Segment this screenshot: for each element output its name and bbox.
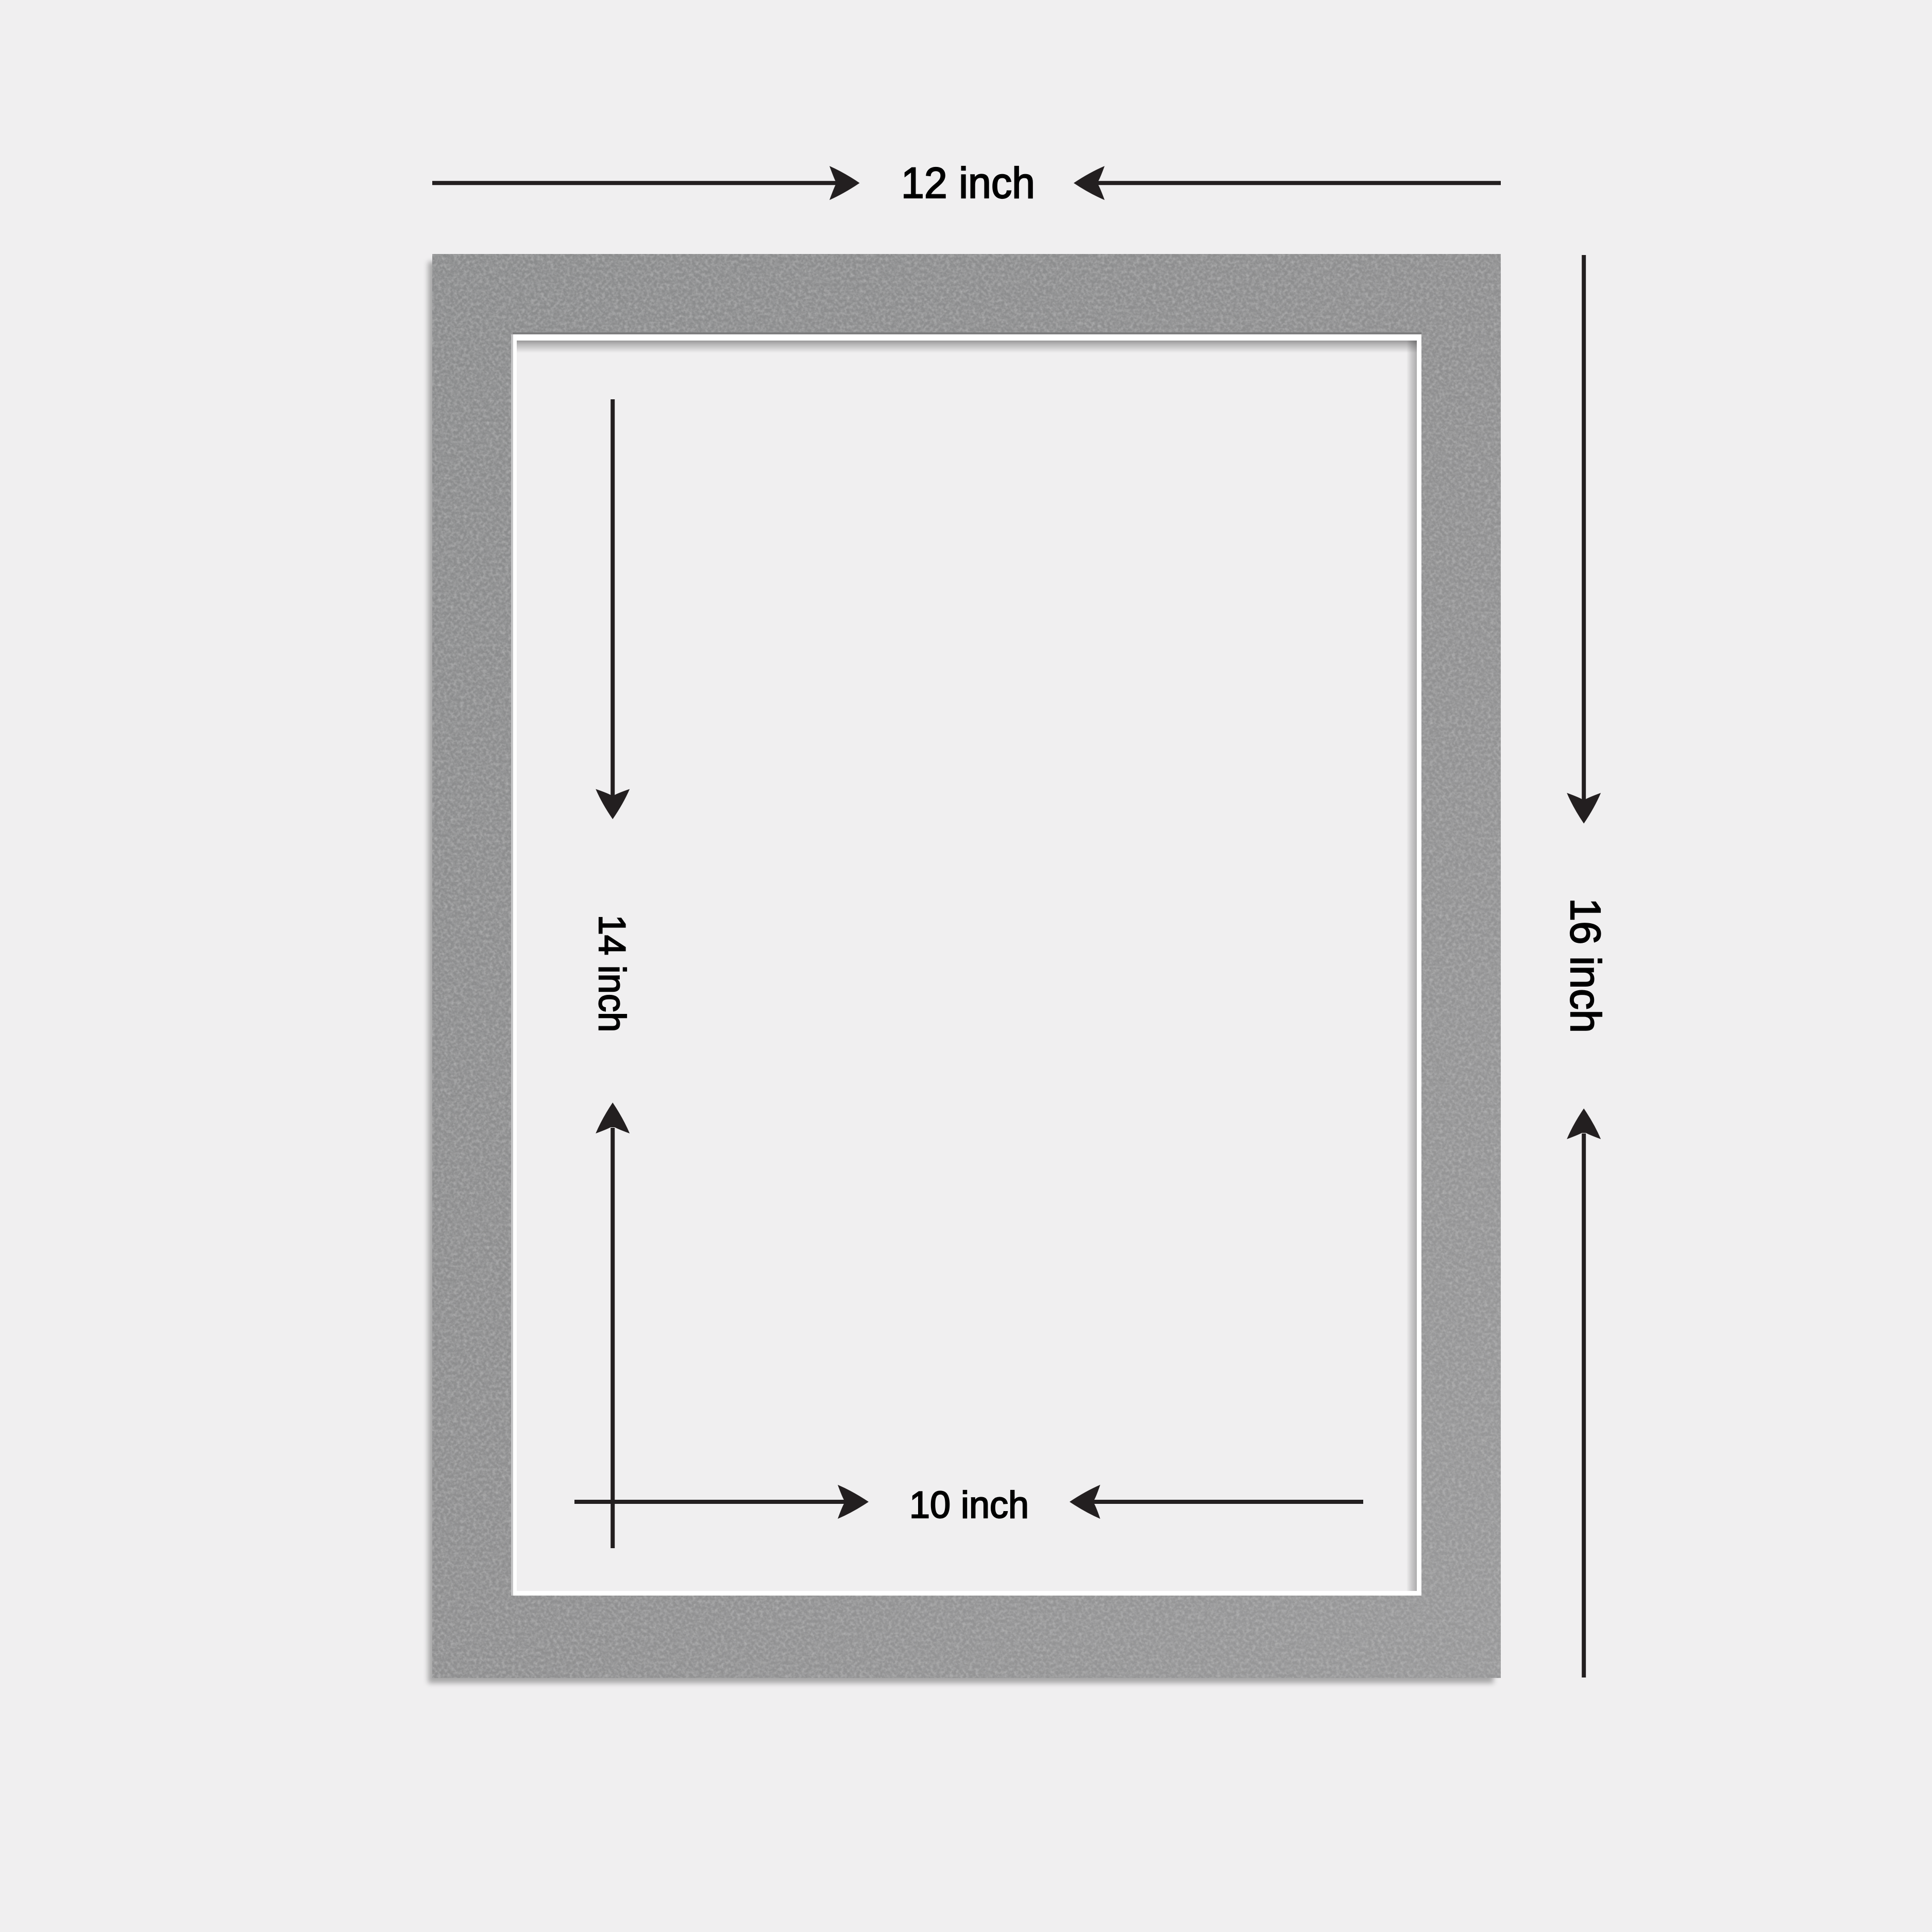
arrow: left pointing right bbox=[574, 1485, 869, 1519]
dimension: outer width 12 inch bbox=[432, 159, 1501, 207]
inner shadow: top edge bbox=[517, 341, 1417, 353]
white bevel of opening bbox=[513, 334, 1421, 1596]
panel: grey mat board frame bbox=[428, 254, 1501, 1683]
dimension: inner height 14 inch bbox=[591, 399, 633, 1548]
arrow: bottom pointing up bbox=[1567, 1109, 1601, 1677]
label: 14 inch: 14 inch bbox=[591, 915, 633, 1032]
frame paper texture bbox=[432, 254, 1501, 1678]
arrow: right pointing left bbox=[1070, 1485, 1363, 1519]
inner shadow: right edge bbox=[1406, 341, 1417, 1591]
label: 10 inch: 10 inch bbox=[909, 1484, 1029, 1526]
bevel edges of opening bbox=[511, 332, 1421, 1596]
arrow: bottom pointing up bbox=[596, 1103, 630, 1548]
label: 12 inch: 12 inch bbox=[901, 159, 1035, 207]
label: 16 inch: 16 inch bbox=[1562, 898, 1609, 1033]
dimension: outer height 16 inch bbox=[1562, 255, 1609, 1677]
frame body bbox=[432, 254, 1501, 1678]
opening interior bbox=[517, 341, 1417, 1591]
frame drop shadow bbox=[428, 262, 1494, 1683]
dimension: inner width 10 inch bbox=[574, 1484, 1363, 1526]
arrow: left pointing right bbox=[432, 166, 859, 200]
arrow: top pointing down bbox=[596, 399, 630, 819]
arrow: top pointing down bbox=[1567, 255, 1601, 823]
arrow: right pointing left bbox=[1074, 166, 1501, 200]
